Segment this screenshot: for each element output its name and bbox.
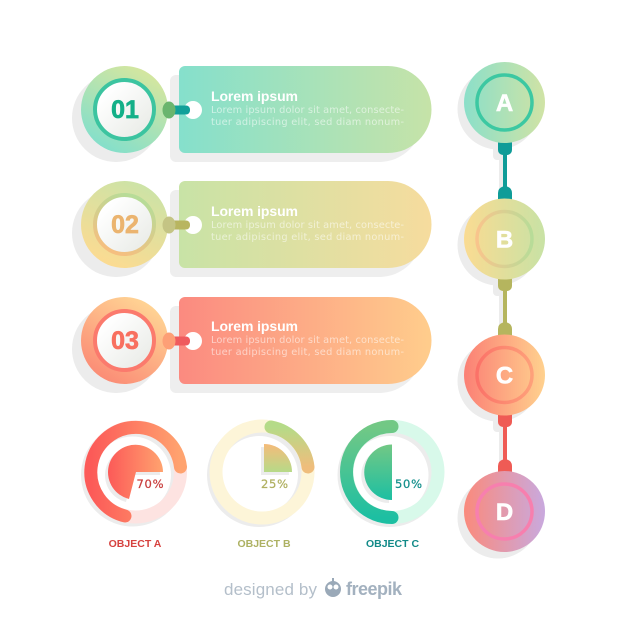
- text: tuer adipiscing elit, sed diam nonum-: [211, 347, 404, 358]
- label: OBJECT C: [366, 538, 419, 550]
- badge 03: [81, 297, 168, 384]
- freepik: freepik: [346, 579, 403, 599]
- percent: 25%: [261, 477, 288, 491]
- pie value: [108, 445, 163, 499]
- percent: 50%: [395, 477, 422, 491]
- text: Lorem ipsum dolor sit amet, consecte-: [211, 105, 404, 116]
- text: Lorem ipsum: [211, 318, 298, 334]
- connector A-B: [498, 138, 512, 200]
- card shadow: [170, 190, 422, 277]
- node B: [464, 198, 545, 280]
- row 3: [72, 297, 432, 393]
- connector B-C: [498, 274, 512, 336]
- badge 03: 03: [111, 327, 139, 355]
- node D: D: [496, 499, 513, 526]
- timeline shadows: [458, 68, 538, 558]
- circle shadow: [72, 189, 160, 277]
- connector: [162, 101, 202, 119]
- freepik credit: [224, 578, 403, 599]
- pie shadow: [261, 447, 289, 475]
- ring shadow: [214, 430, 304, 520]
- ring shadow: [344, 430, 435, 520]
- donut chart A: [88, 427, 180, 550]
- row 1: [72, 66, 432, 162]
- pie shadow: [361, 448, 389, 503]
- circle shadow: [72, 74, 160, 162]
- text: Lorem ipsum dolor sit amet, consecte-: [211, 220, 404, 231]
- card shadow: [170, 306, 422, 393]
- ring value: [91, 427, 180, 516]
- ring track: [347, 426, 438, 518]
- pie value: [264, 444, 292, 472]
- text: tuer adipiscing elit, sed diam nonum-: [211, 232, 404, 243]
- text: Lorem ipsum dolor sit amet, consecte-: [211, 335, 404, 346]
- percent: 70%: [136, 477, 164, 491]
- badge 01: [81, 66, 168, 153]
- node A: [464, 62, 545, 143]
- ring value: [271, 427, 308, 467]
- card 1: [179, 66, 432, 153]
- label: OBJECT A: [109, 538, 162, 550]
- connector C-D: [498, 410, 512, 473]
- node C: C: [496, 362, 513, 390]
- card 2: [179, 181, 432, 268]
- connector: [162, 216, 202, 234]
- donut chart B: [214, 426, 308, 550]
- timeline A to D: [458, 62, 545, 558]
- text: Lorem ipsum: [211, 88, 298, 104]
- node C: [464, 334, 545, 416]
- text: [211, 203, 404, 243]
- node D: [464, 471, 545, 552]
- ring track: [216, 426, 308, 518]
- text: [211, 318, 404, 358]
- badge 01: 01: [111, 96, 139, 124]
- designed by: designed by: [224, 580, 318, 599]
- connector: [162, 332, 202, 350]
- pie value: [364, 444, 392, 500]
- icon: freepik mascot: [325, 578, 341, 597]
- text: [211, 88, 404, 128]
- ring track: [90, 427, 180, 517]
- card shadow: [170, 75, 422, 162]
- badge 02: 02: [111, 211, 139, 239]
- row 2: [72, 181, 432, 277]
- ring value: [347, 426, 392, 518]
- text: tuer adipiscing elit, sed diam nonum-: [211, 117, 404, 128]
- node B: B: [496, 226, 513, 254]
- badge 02: [81, 181, 168, 268]
- pie shadow: [105, 448, 160, 502]
- node A: A: [496, 90, 513, 117]
- circle shadow: [72, 305, 160, 393]
- donut chart C: [344, 426, 438, 550]
- ring shadow: [88, 430, 178, 520]
- card 3: [179, 297, 432, 384]
- text: Lorem ipsum: [211, 203, 298, 219]
- label: OBJECT B: [237, 538, 291, 550]
